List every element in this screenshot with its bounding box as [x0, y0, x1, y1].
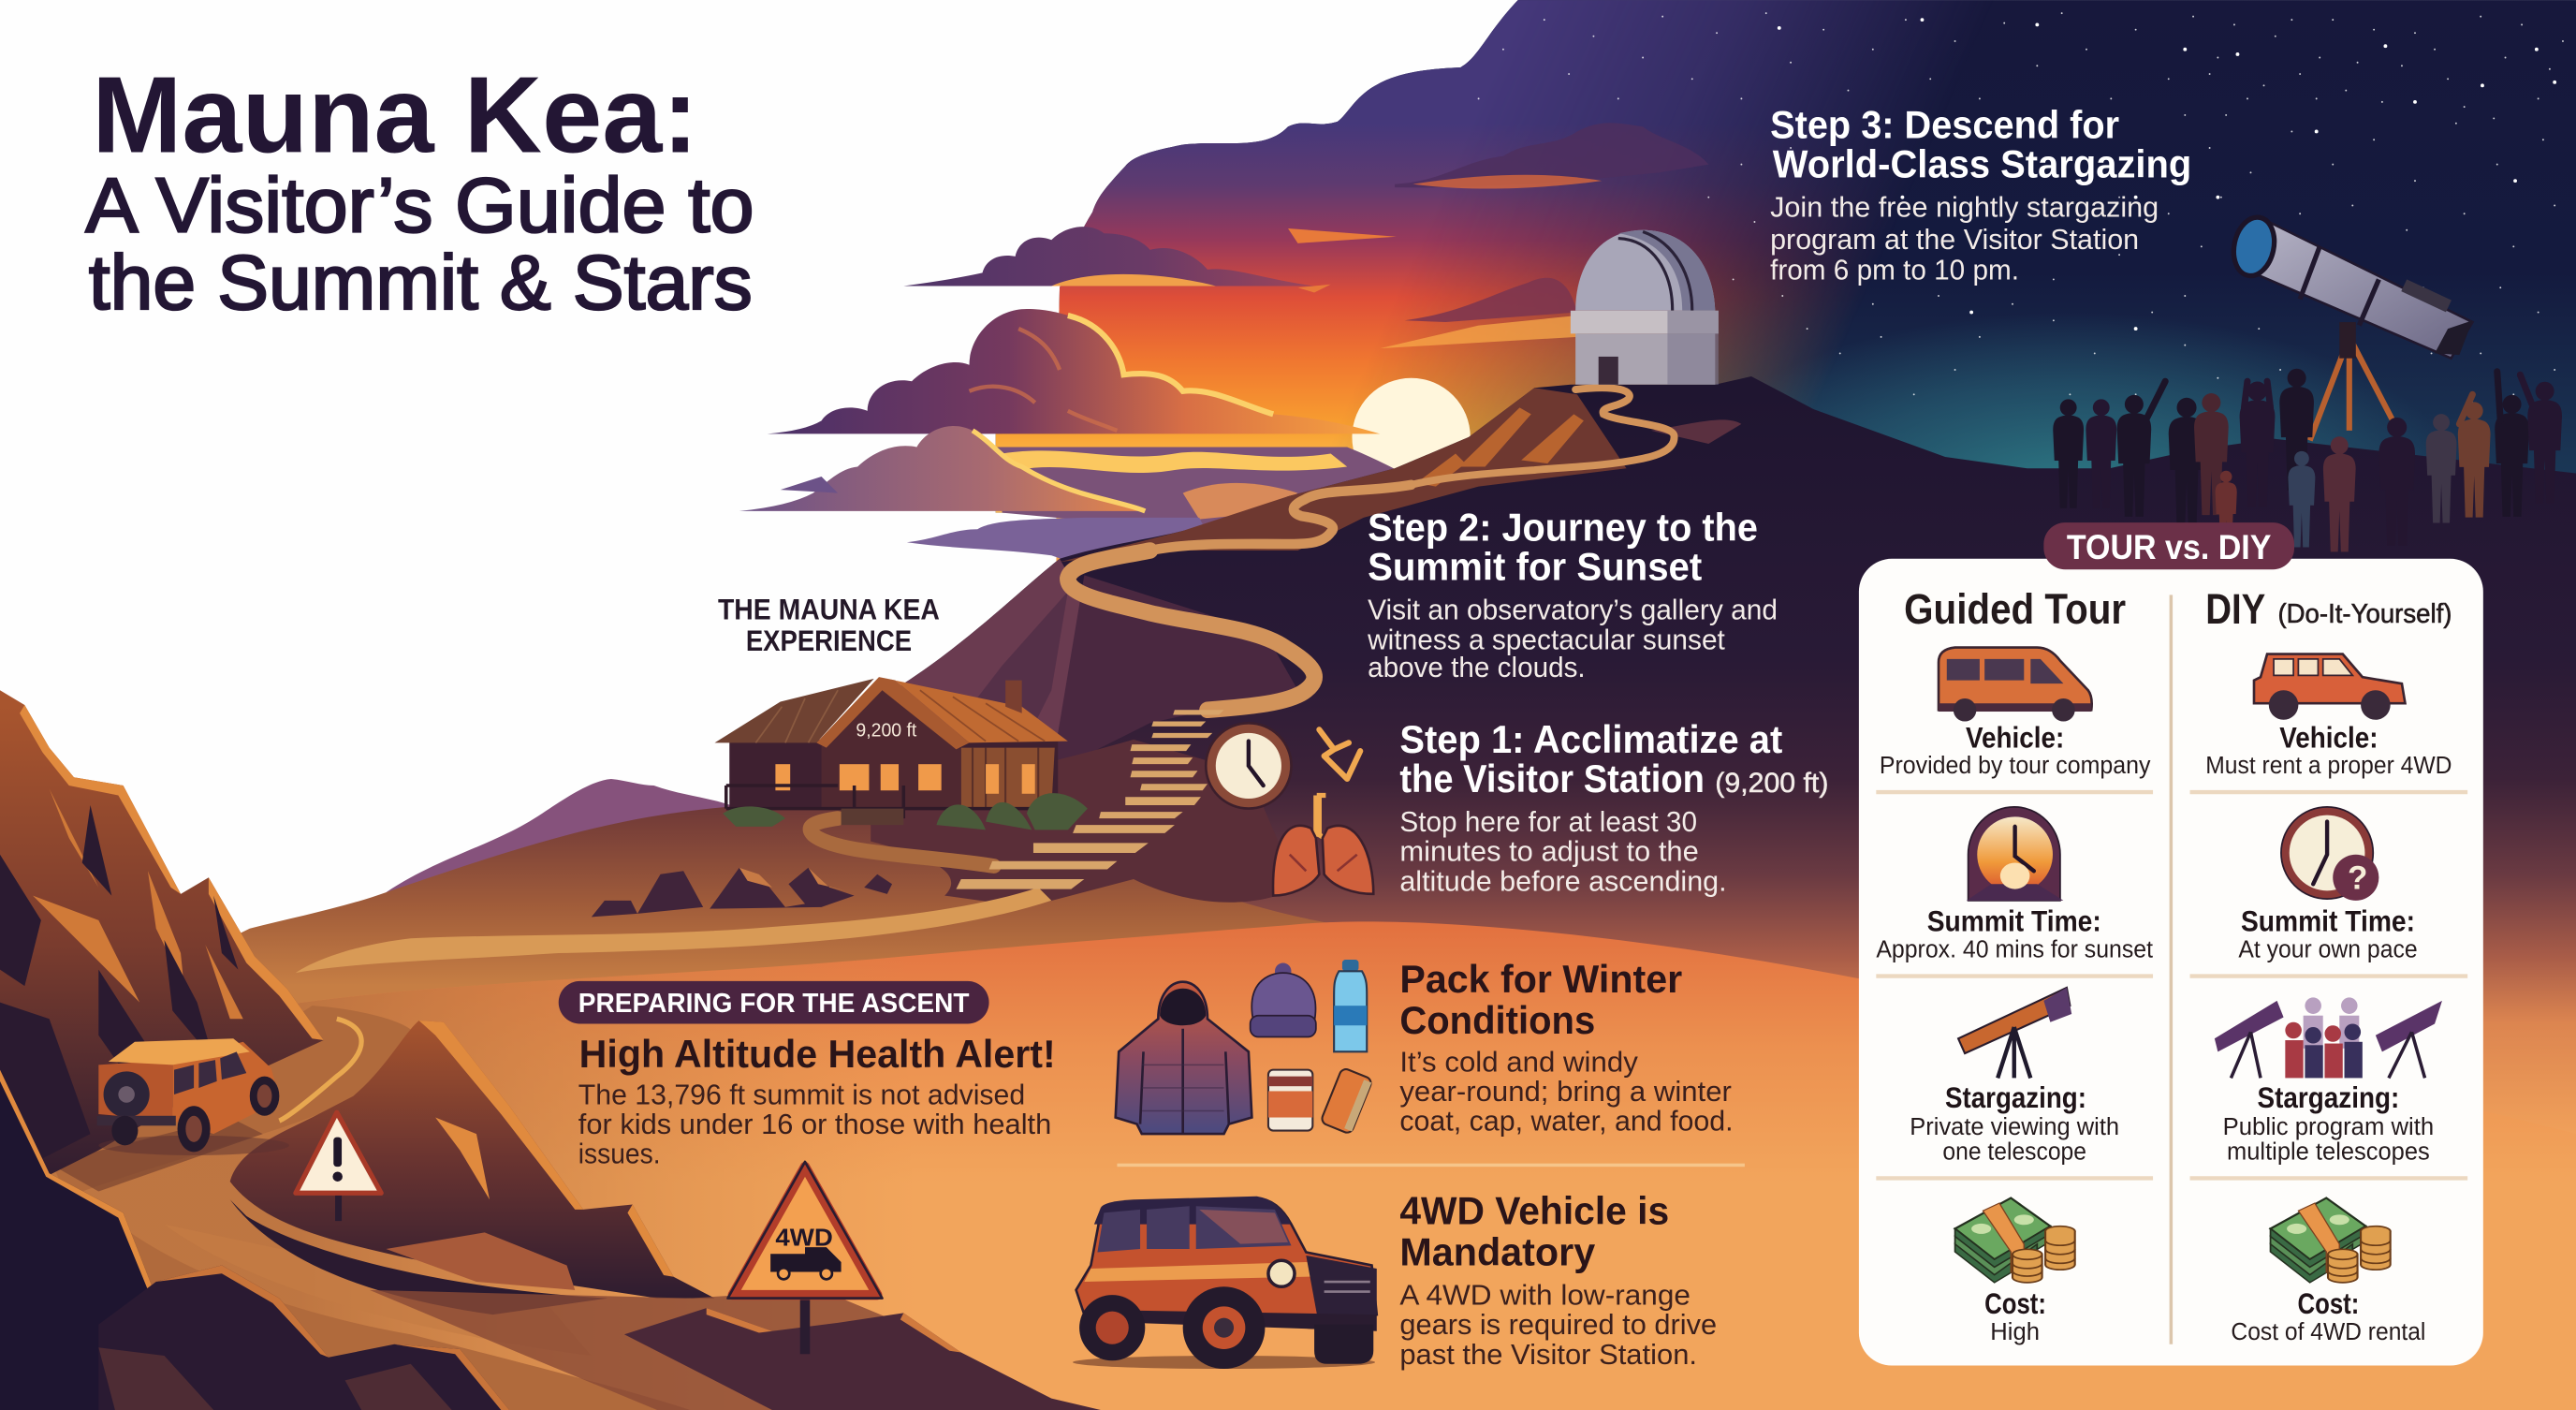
- icon: large 4WD vehicle: [1073, 1197, 1377, 1369]
- labels: stargazing: multiple telescopes: [2227, 1138, 2430, 1166]
- left cliffs and mountain road: [0, 690, 1101, 1410]
- observatory dome: [1571, 230, 1719, 385]
- upper cliff: [0, 690, 324, 1183]
- icon: clock with question mark: [2281, 807, 2378, 901]
- jeep wheels: [111, 1116, 138, 1145]
- cabin bushes: [723, 793, 1088, 830]
- sandy road across the hill: [296, 888, 1051, 973]
- step 3 text: Join the free nightly stargazing: [1770, 191, 2159, 224]
- title: A Visitor’s Guide to: [85, 163, 754, 249]
- 4WD vehicle text: 4WD Vehicle is: [1399, 1189, 1669, 1233]
- step 1 text: Stop here for at least 30: [1399, 805, 1697, 838]
- section pill: preparing for the ascent: [559, 981, 989, 1023]
- column heading: DIY: [2205, 585, 2452, 633]
- icon: sunset clock: [1967, 807, 2063, 901]
- pack for winter text: coat, cap, water, and food.: [1399, 1105, 1734, 1138]
- night and sunset sky: [996, 0, 2576, 562]
- winding road to the summit: [1068, 388, 1675, 710]
- column heading: DIY: DIY: [2205, 585, 2265, 633]
- cloud: lower haze: [907, 518, 1216, 567]
- 4WD vehicle text: A 4WD with low-range: [1399, 1279, 1690, 1312]
- labels: vehicle: [1880, 721, 2452, 779]
- icon: food jar: [1268, 1070, 1312, 1131]
- dark hump under the stairs: [871, 740, 1298, 907]
- step 1 text: [1399, 717, 1828, 897]
- vehicle grille and headlight: [1306, 1256, 1377, 1318]
- icon: clock with question mark: ?: [2348, 860, 2367, 897]
- roadside rocks on the hill: [592, 868, 892, 917]
- ground hill around the cabin: [0, 800, 1643, 1410]
- panel: tour vs DIY comparison: [1859, 522, 2483, 1366]
- step 3 text: Step 3: Descend for: [1770, 102, 2119, 146]
- labels: vehicle: Provided by tour company: [1880, 751, 2151, 779]
- icon: money for DIY: [2271, 1198, 2391, 1283]
- labels: cost: [1984, 1286, 2425, 1345]
- cabin deck: [726, 786, 1051, 818]
- icon: snack bar: [1320, 1067, 1373, 1135]
- cloud: upper: [903, 227, 1314, 286]
- step 3 text: from 6 pm to 10 pm.: [1770, 253, 2019, 286]
- step 1 text: Step 1: Acclimatize at: [1399, 717, 1782, 761]
- title: [85, 53, 754, 326]
- step 3 text: program at the Visitor Station: [1770, 223, 2139, 256]
- icon: rental 4WD: [2254, 654, 2405, 720]
- icon: money for tour: [1955, 1198, 2075, 1283]
- vehicle roof and windows: [1094, 1197, 1292, 1225]
- step 2 text: Summit for Sunset: [1368, 545, 1702, 589]
- 4WD vehicle text: past the Visitor Station.: [1399, 1338, 1697, 1371]
- pack for winter text: year-round; bring a winter: [1399, 1075, 1732, 1108]
- health alert text: The 13,796 ft summit is not advised: [578, 1078, 1025, 1110]
- road surface: [50, 1006, 690, 1410]
- divider: [1117, 1164, 1745, 1167]
- column heading: DIY: (Do-It-Yourself): [2277, 599, 2452, 629]
- labels: cost: Cost:: [1984, 1286, 2046, 1320]
- lower-left dark rocks: [0, 1070, 213, 1410]
- orange foreground hill: [0, 921, 2576, 1410]
- far purple hill: [386, 779, 920, 920]
- heading: the Mauna Kea experience: THE MAUNA KEA: [718, 593, 940, 626]
- stars: [1479, 13, 2563, 403]
- step 3 text: World-Class Stargazing: [1773, 142, 2191, 186]
- labels: cost: High: [1990, 1317, 2040, 1345]
- center rock: [230, 1021, 714, 1299]
- step 2 text: [1367, 505, 1778, 683]
- cloud: haze band behind the ridge: [996, 447, 1429, 529]
- icon: telescope on tripod: [2229, 213, 2472, 440]
- step 1 text: minutes to adjust to the: [1399, 835, 1699, 868]
- icon: jeep on the mountain road: [97, 1038, 289, 1155]
- vehicle body: [1076, 1198, 1377, 1328]
- jeep shadow: [98, 1136, 289, 1155]
- step 1 text: (9,200 ft): [1715, 768, 1828, 799]
- cloud: middle: [768, 309, 1380, 433]
- labels: summit time: Approx. 40 mins for sunset: [1876, 934, 2154, 962]
- vehicle shadow: [1073, 1356, 1375, 1369]
- step 1 text: altitude before ascending.: [1399, 864, 1727, 897]
- step 2 text: witness a spectacular sunset: [1367, 623, 1725, 655]
- cabin walls: [729, 740, 1058, 809]
- icon: warning sign: [296, 1112, 381, 1221]
- labels: summit time: [1876, 903, 2418, 962]
- 4WD vehicle text: [1399, 1189, 1717, 1371]
- jeep roof: [109, 1038, 250, 1065]
- step 2 text: Visit an observatory’s gallery and: [1368, 594, 1778, 626]
- stargazing crowd: [2053, 369, 2562, 551]
- health alert text: for kids under 16 or those with health: [578, 1108, 1051, 1140]
- pack for winter text: Conditions: [1399, 998, 1595, 1042]
- labels: vehicle: Vehicle:: [2279, 721, 2378, 755]
- cabin windows: [775, 764, 1035, 794]
- labels: stargazing: Stargazing:: [1945, 1080, 2086, 1114]
- brown ridge facets: [822, 388, 1741, 805]
- step 2 text: Step 2: Journey to the: [1368, 505, 1758, 549]
- cabin elevation label: 9,200 ft: [856, 720, 917, 741]
- icon: 4WD road sign: 4WD: [775, 1225, 833, 1251]
- step 1 clock icon: [1206, 723, 1292, 809]
- pack for winter text: Pack for Winter: [1399, 957, 1682, 1001]
- labels: stargazing: Private viewing with: [1910, 1112, 2119, 1140]
- pack for winter text: [1399, 957, 1734, 1138]
- labels: stargazing: [1910, 1080, 2434, 1166]
- title: Mauna Kea:: [92, 53, 698, 175]
- labels: stargazing: Stargazing:: [2258, 1080, 2399, 1114]
- cloud: lower: [739, 426, 1145, 511]
- column heading: guided tour: Guided Tour: [1904, 585, 2126, 633]
- icon: tour van: [1939, 648, 2092, 722]
- vehicle wheels: [1079, 1295, 1145, 1360]
- title: the Summit & Stars: [89, 240, 753, 326]
- 4WD vehicle text: gears is required to drive: [1399, 1308, 1717, 1341]
- jeep spare tyre and bumper: [104, 1071, 150, 1118]
- step 2 text: above the clouds.: [1368, 651, 1586, 683]
- labels: cost: Cost:: [2298, 1286, 2359, 1320]
- section pill: preparing for the ascent: PREPARING FOR THE ASCENT: [578, 989, 970, 1019]
- column divider: [2170, 595, 2173, 1344]
- 4WD vehicle text: Mandatory: [1399, 1229, 1596, 1273]
- step 1 down arrow: [1319, 729, 1360, 779]
- step 3 text: [1770, 102, 2191, 286]
- labels: cost: Cost of 4WD rental: [2231, 1317, 2425, 1345]
- cabin roof: [714, 679, 874, 742]
- icon: public telescopes and group: [2215, 997, 2442, 1078]
- health alert text: [578, 1032, 1056, 1170]
- step 1 lungs icon: [1273, 796, 1373, 896]
- labels: vehicle: Vehicle:: [1966, 721, 2064, 755]
- health alert text: issues.: [578, 1138, 661, 1170]
- labels: stargazing: Public program with: [2223, 1112, 2434, 1140]
- step 1 text: the Visitor Station: [1399, 756, 1705, 800]
- icon: winter jacket: [1116, 982, 1251, 1134]
- cabin at 9,200 ft: [714, 677, 1088, 830]
- sun: [1352, 378, 1471, 496]
- health alert text: High Altitude Health Alert!: [579, 1032, 1056, 1076]
- bottom-centre rocks: [370, 1290, 1018, 1410]
- labels: stargazing: one telescope: [1942, 1138, 2086, 1166]
- labels: vehicle: Must rent a proper 4WD: [2205, 751, 2452, 779]
- heading: the Mauna Kea experience: EXPERIENCE: [746, 624, 912, 657]
- heading: the Mauna Kea experience: [718, 593, 940, 657]
- stone stairs: [956, 710, 1224, 889]
- clouds: [739, 227, 1429, 567]
- pill: tour vs DIY: TOUR vs. DIY: [2067, 528, 2271, 566]
- pack for winter text: It’s cold and windy: [1399, 1045, 1638, 1078]
- labels: summit time: At your own pace: [2238, 934, 2418, 962]
- icon: beanie: [1251, 963, 1316, 1037]
- icon: private telescope: [1958, 988, 2071, 1078]
- main dark mountain: [731, 376, 2576, 1410]
- jeep body: [172, 1042, 279, 1134]
- labels: summit time: Summit Time:: [2241, 903, 2415, 937]
- jeep windows: [174, 1051, 246, 1094]
- road to the cabin: [810, 818, 994, 866]
- icon: 4WD road sign: [728, 1162, 882, 1354]
- row dividers: [1876, 792, 2467, 1178]
- icon: water bottle: [1334, 960, 1367, 1051]
- labels: summit time: Summit Time:: [1927, 903, 2101, 937]
